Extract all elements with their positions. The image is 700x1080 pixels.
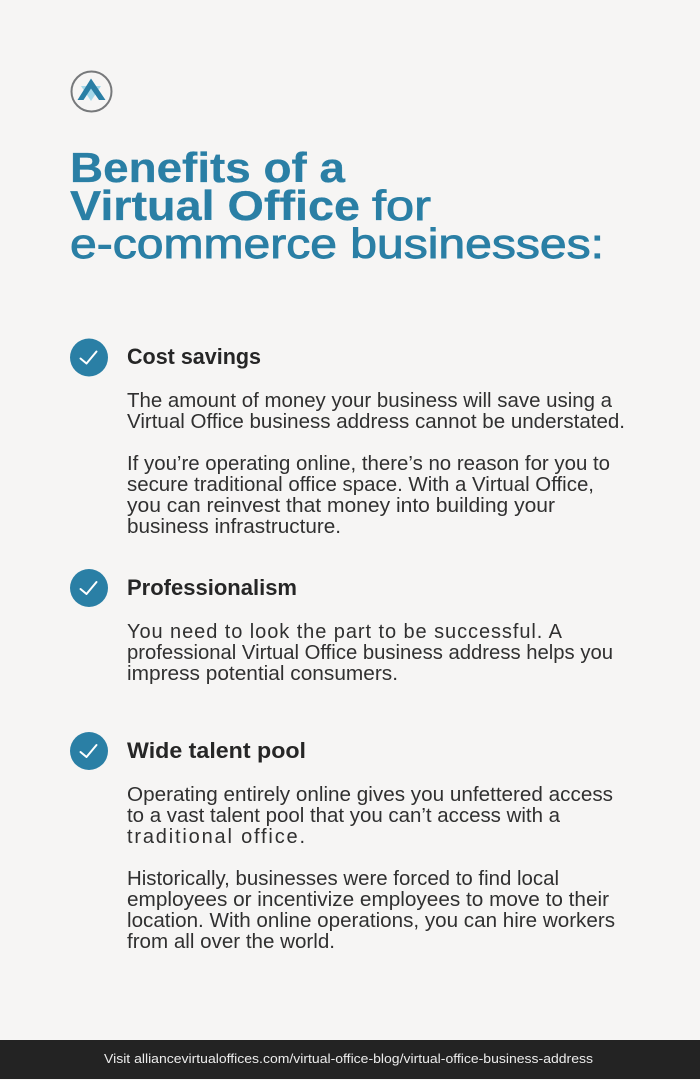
panel: cost savings <box>70 338 625 538</box>
text block: cost savings: The amount of money your business will save using a <box>127 390 613 412</box>
text block: cost savings: If you’re operating online, there’s no reason for you to <box>127 453 610 475</box>
text block: wide talent pool: location. With online operations, you can hire workers <box>127 910 615 932</box>
text block: wide talent pool: from all over the world. <box>127 931 335 953</box>
icon: check badge <box>70 338 108 376</box>
title <box>70 144 604 267</box>
text block: wide talent pool <box>127 784 615 953</box>
heading: professionalism: Professionalism <box>127 575 297 600</box>
text block: cost savings: you can reinvest that money into building your <box>127 495 555 517</box>
footer bar <box>0 1040 700 1079</box>
text block: professionalism: impress potential consumers. <box>127 663 398 685</box>
text block: cost savings: secure traditional office space. With a Virtual Office, <box>127 474 594 496</box>
icon: check badge <box>70 569 108 607</box>
title: Benefits of a <box>70 144 346 191</box>
panel: wide talent pool <box>70 732 615 953</box>
icon: check badge <box>70 732 108 770</box>
footer link text: Visit alliancevirtualoffices.com/virtual-office-blog/virtual-office-business-address <box>104 1051 594 1066</box>
text block: professionalism <box>127 621 613 685</box>
icon: logo <box>72 72 112 112</box>
text block: wide talent pool: traditional office. <box>127 826 305 848</box>
text block: cost savings: business infrastructure. <box>127 516 341 538</box>
text block: wide talent pool: Historically, businesses were forced to find local <box>127 868 559 890</box>
heading: cost savings: Cost savings <box>127 344 261 369</box>
text block: professionalism: professional Virtual Office business address helps you <box>127 642 613 664</box>
heading: wide talent pool: Wide talent pool <box>127 738 306 763</box>
text block: cost savings: Virtual Office business address cannot be understated. <box>127 411 625 433</box>
title: Virtual Office <box>70 182 360 229</box>
text block: professionalism: You need to look the part to be successful. A <box>127 621 563 643</box>
title: e-commerce businesses: <box>70 220 604 267</box>
text block: wide talent pool: to a vast talent pool that you can’t access with a <box>127 805 561 827</box>
text block: wide talent pool: Operating entirely online gives you unfettered access <box>127 784 613 806</box>
panel: professionalism <box>70 569 613 685</box>
text block: wide talent pool: employees or incentivize employees to move to their <box>127 889 609 911</box>
text block: cost savings <box>127 390 625 538</box>
title: for <box>372 182 431 229</box>
